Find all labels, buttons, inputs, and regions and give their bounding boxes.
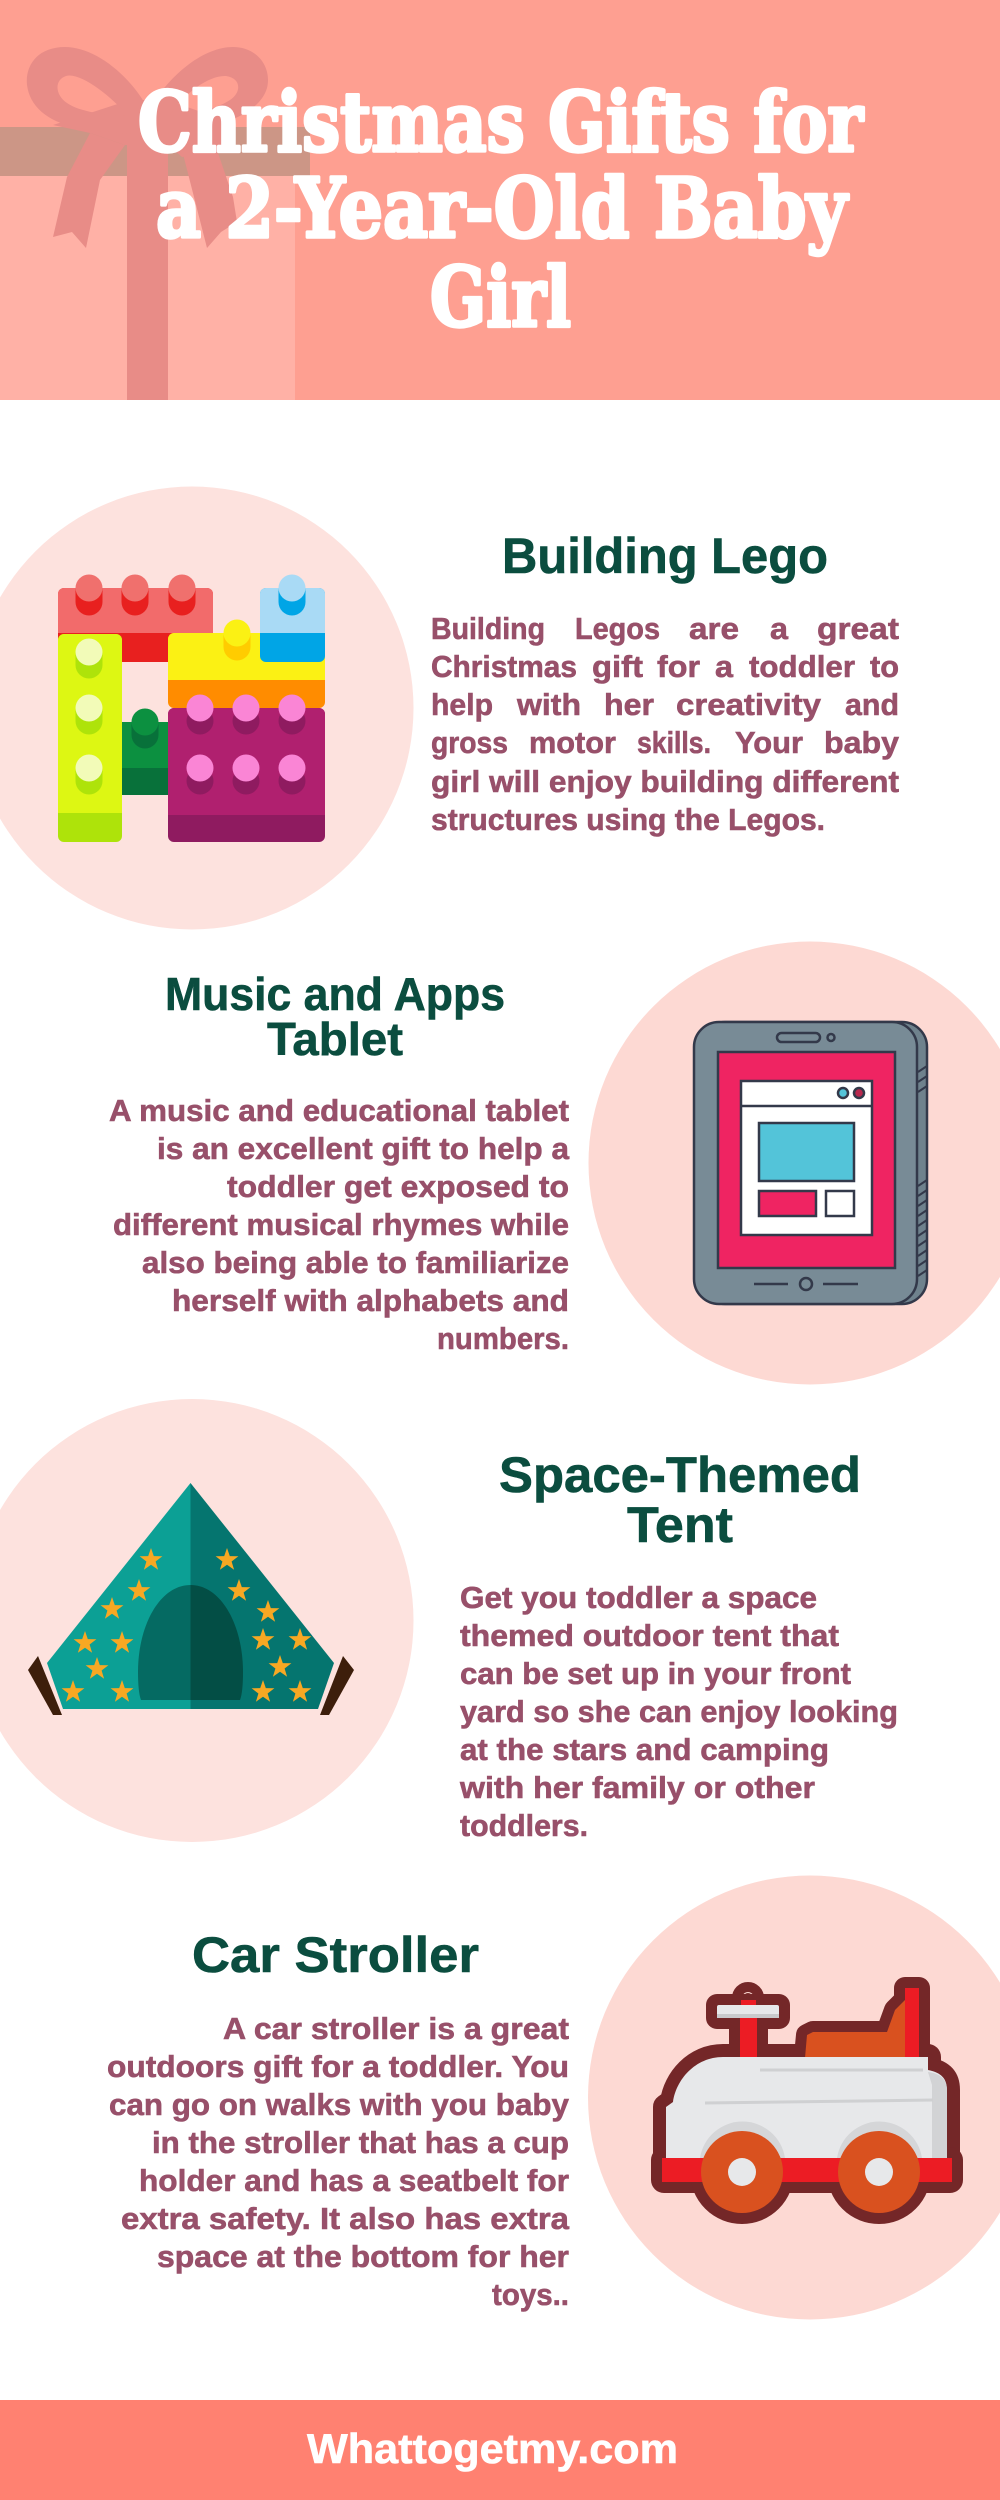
text block: car stroller: outdoors gift for a toddler. You <box>107 2049 569 2084</box>
icon: tent <box>28 1483 354 1715</box>
text block: car stroller <box>107 2011 570 2312</box>
heading: space-themed tent <box>499 1447 861 1553</box>
panel: music and apps tablet <box>109 942 1000 1384</box>
heading: space-themed tent: Space-Themed <box>499 1447 861 1503</box>
text block: car stroller: toys.. <box>492 2277 569 2312</box>
heading: space-themed tent: Tent <box>627 1497 733 1553</box>
header banner <box>0 0 1000 400</box>
text block: building lego: a <box>715 649 734 684</box>
title: Girl <box>430 250 571 346</box>
text block: building lego: gift <box>592 649 643 684</box>
text block: building lego: Building <box>431 611 545 646</box>
title: Christmas Gifts for <box>138 75 864 171</box>
text block: car stroller: extra safety. It also has extra <box>121 2201 570 2236</box>
text block: space-themed tent: with her family or other <box>459 1770 815 1805</box>
text block: space-themed tent: at the stars and camping <box>460 1732 829 1767</box>
icon background circle: car <box>588 1876 1000 2320</box>
text block: car stroller: in the stroller that has a cup <box>152 2125 569 2160</box>
text block: car stroller: A car stroller is a great <box>223 2011 569 2046</box>
title: a 2-Year-Old Baby <box>156 161 849 257</box>
text block: building lego: with <box>516 687 581 722</box>
text block: building lego: her <box>604 687 654 722</box>
text block: building lego: Your <box>735 725 803 760</box>
text block: building lego: to <box>870 649 899 684</box>
text block: building lego: a <box>770 611 789 646</box>
text block: music and apps tablet: toddler get exposed to <box>227 1169 569 1204</box>
icon: car stroller <box>662 1988 952 2213</box>
text block: building lego: Legos <box>575 611 660 646</box>
heading: building lego: Building Lego <box>502 528 828 584</box>
text block: building lego: motor <box>529 725 616 760</box>
text block: building lego: help <box>431 687 493 722</box>
text block: space-themed tent: Get you toddler a space <box>460 1580 817 1615</box>
icon: gift box with bow <box>0 47 310 400</box>
heading: music and apps tablet: Tablet <box>267 1013 403 1065</box>
panel: space-themed tent <box>0 1399 898 1843</box>
icon: lego bricks <box>58 574 325 842</box>
text block: building lego: and <box>845 687 899 722</box>
text block: building lego: gross <box>431 725 508 760</box>
text block: music and apps tablet: different musical rhymes while <box>113 1207 569 1242</box>
text block: building lego: girl will enjoy building different <box>431 764 899 799</box>
text block: car stroller: space at the bottom for her <box>157 2239 569 2274</box>
icon background circle: lego <box>0 486 414 930</box>
text block: music and apps tablet: A music and educational tablet <box>109 1093 569 1128</box>
text block: space-themed tent: themed outdoor tent that <box>460 1618 839 1653</box>
icon background circle: tablet <box>588 942 1000 1384</box>
text block: car stroller: holder and has a seatbelt for <box>139 2163 569 2198</box>
heading: music and apps tablet: Music and Apps <box>165 968 505 1020</box>
text block: space-themed tent: toddlers. <box>460 1808 588 1843</box>
text block: building lego: great <box>817 611 899 646</box>
panel: building lego <box>0 486 900 930</box>
panel: car stroller <box>107 1876 1000 2320</box>
text block: car stroller: can go on walks with you baby <box>109 2087 570 2122</box>
text block: space-themed tent: yard so she can enjoy looking <box>460 1694 898 1729</box>
title <box>138 75 864 346</box>
text block: music and apps tablet: numbers. <box>437 1321 569 1356</box>
text block: building lego <box>431 611 900 837</box>
text block: space-themed tent <box>459 1580 898 1843</box>
text block: building lego: creativity <box>676 687 822 722</box>
heading: car stroller: Car Stroller <box>192 1927 479 1983</box>
icon background circle: tent <box>0 1399 414 1842</box>
text block: music and apps tablet <box>109 1093 570 1356</box>
text block: music and apps tablet: herself with alphabets and <box>172 1283 569 1318</box>
text block: building lego: structures using the Legos. <box>431 802 825 837</box>
text block: building lego: are <box>689 611 739 646</box>
footer <box>0 2400 1000 2500</box>
icon: tablet <box>694 1022 927 1304</box>
footer website text: Whattogetmy.com <box>307 2425 678 2472</box>
text block: building lego: for <box>657 649 700 684</box>
text block: building lego: skills. <box>637 725 711 760</box>
text block: building lego: toddler <box>749 649 855 684</box>
text block: building lego: Christmas <box>431 649 577 684</box>
text block: music and apps tablet: is an excellent gift to help a <box>157 1131 570 1166</box>
text block: space-themed tent: can be set up in your front <box>460 1656 851 1691</box>
text block: music and apps tablet: also being able to familiarize <box>142 1245 569 1280</box>
heading: music and apps tablet <box>165 968 505 1065</box>
text block: building lego: baby <box>824 725 900 760</box>
